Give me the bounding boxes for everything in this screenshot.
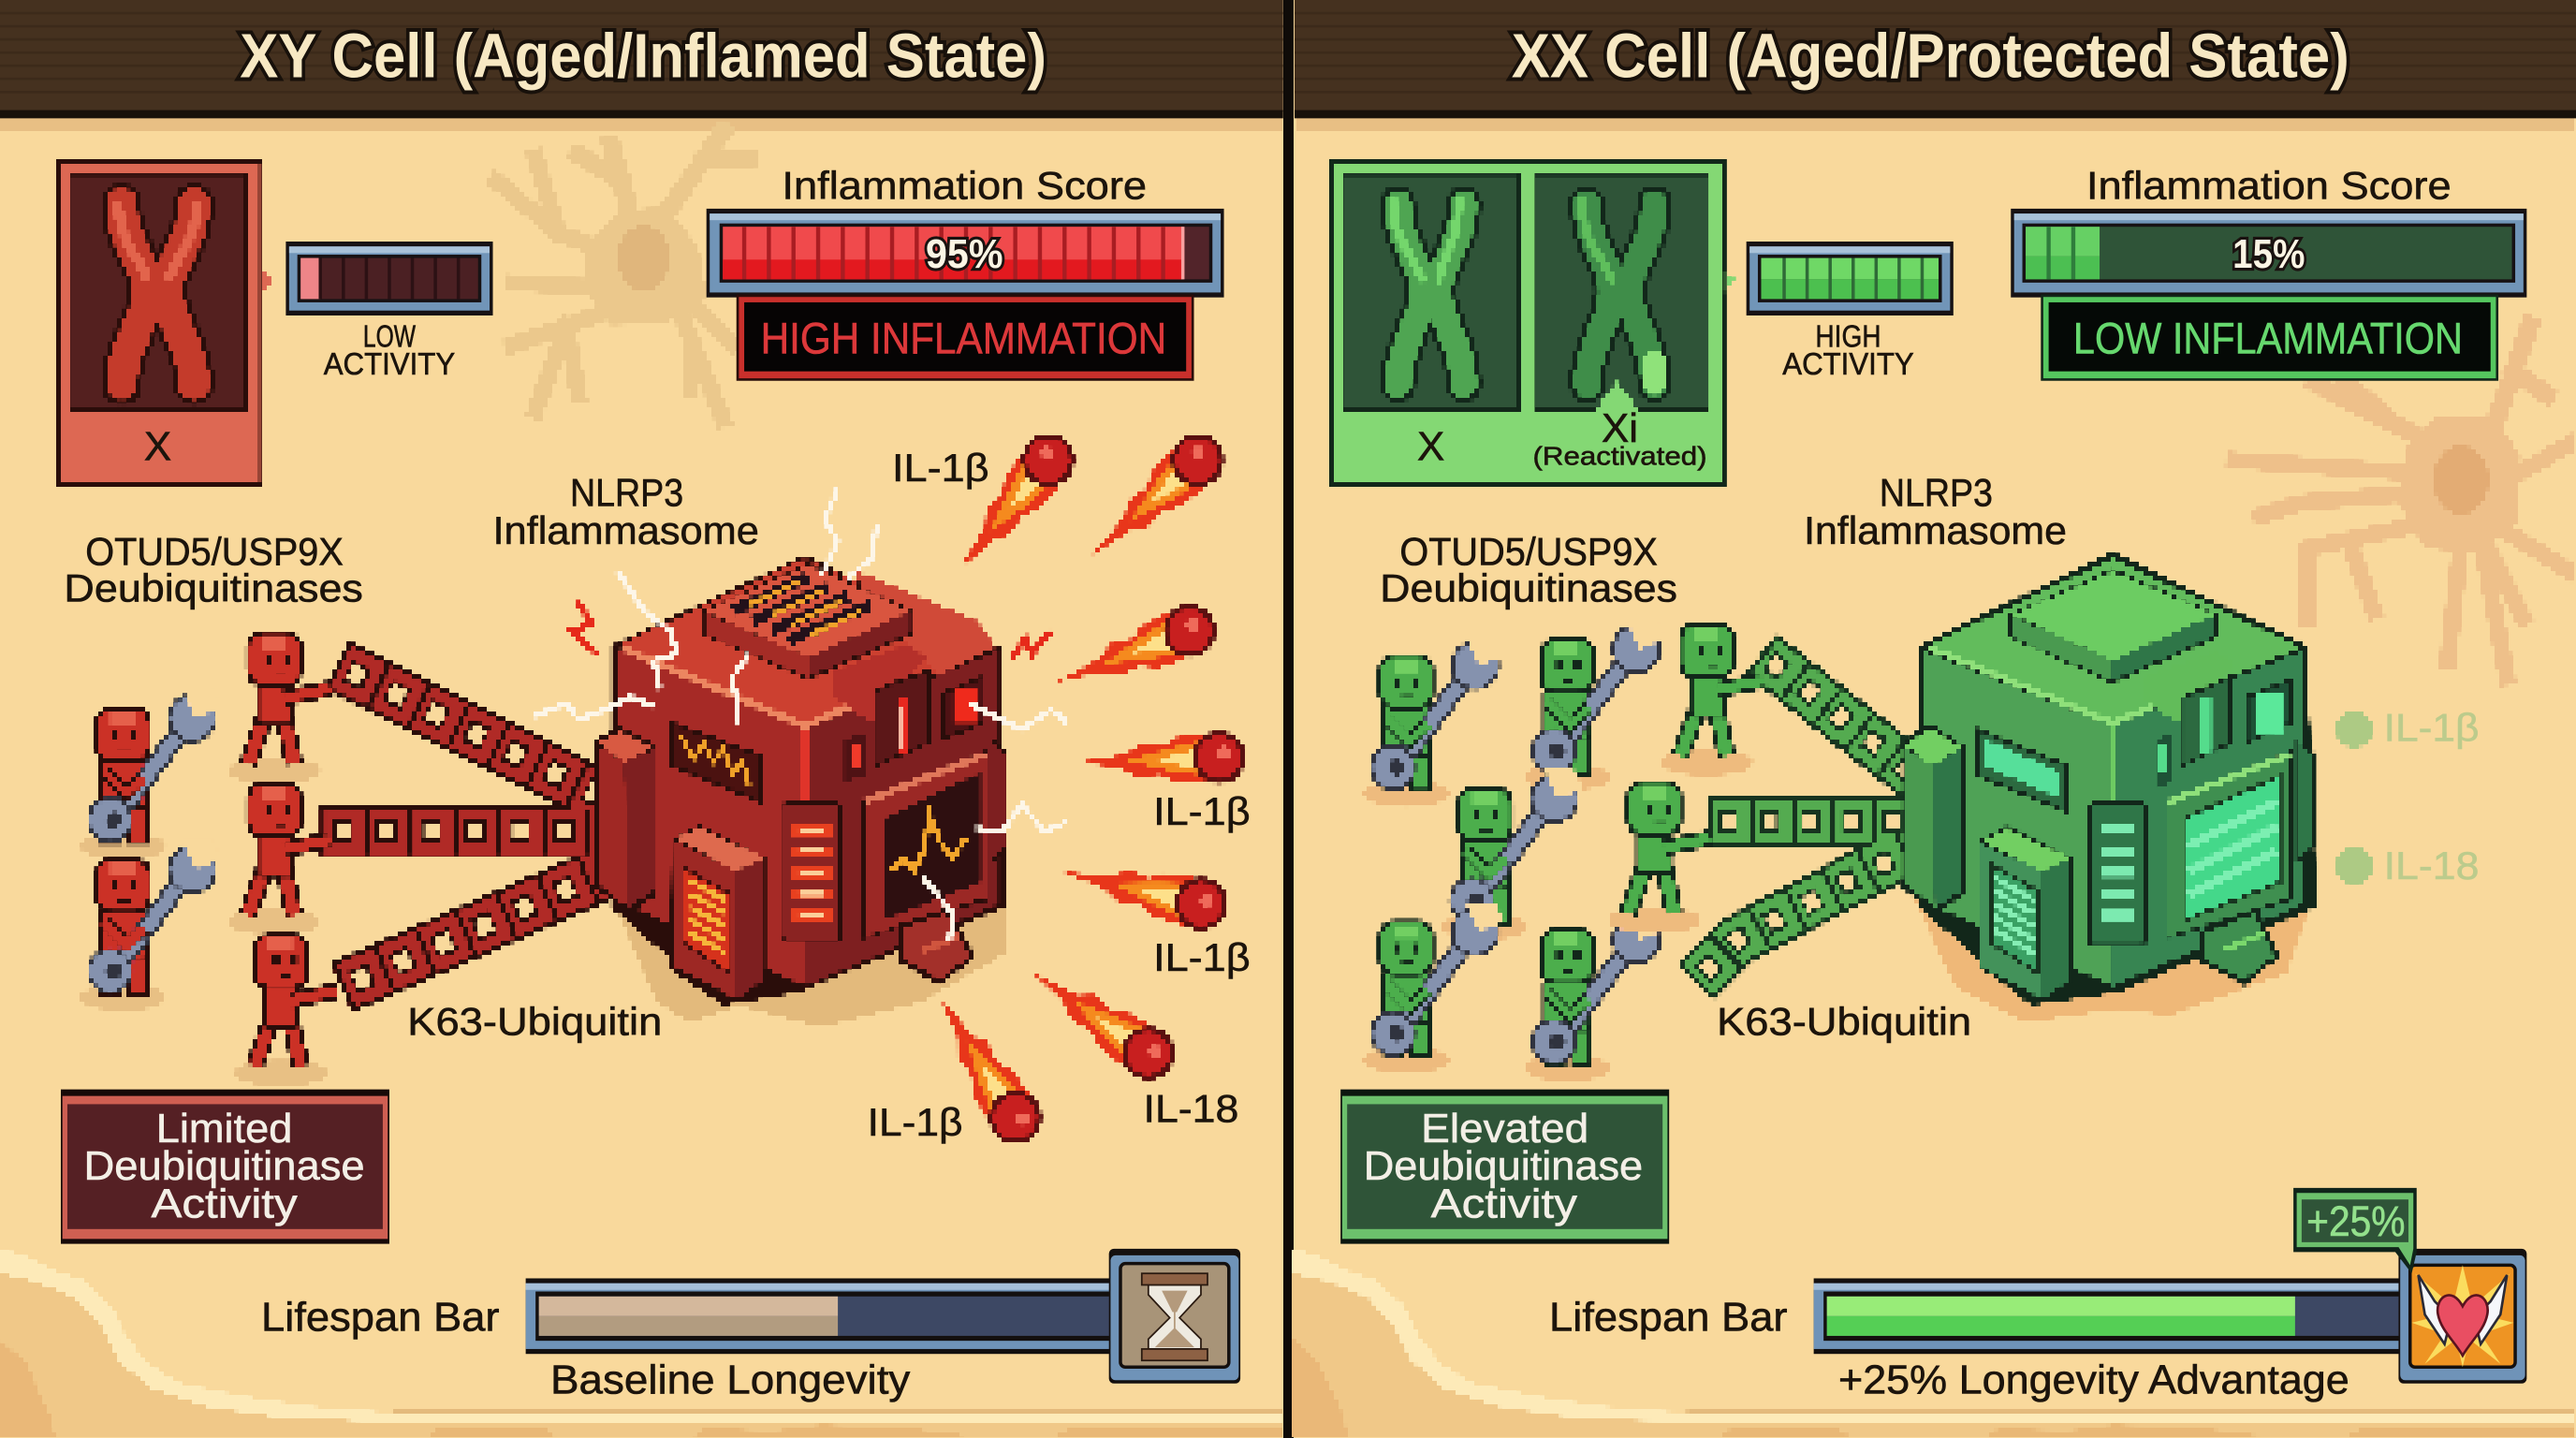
label: Xi reactivated: (Reactivated) [1533, 442, 1707, 471]
label: K63-ubiquitin: K63-Ubiquitin [407, 1000, 662, 1044]
callout: +25% [2293, 1188, 2417, 1273]
label: NLRP3 inflammasome [493, 471, 759, 552]
callout: elevated deubiquitinase activity [1340, 1090, 1669, 1244]
inflammasome scene: chains, workers, machine, cytokines [80, 423, 1246, 1153]
inflammation score bar 95%: 95% [926, 231, 1003, 277]
label: NLRP3 inflammasome: NLRP3 [1880, 471, 1993, 515]
caption: baseline longevity: Baseline Longevity [550, 1357, 910, 1402]
machine: NLRP3 inflammasome [1902, 552, 2317, 1005]
label: X: X [1417, 423, 1444, 469]
faded cytokine labels: IL-18 [2384, 844, 2479, 888]
label: low activity: LOW [363, 319, 416, 354]
inflammasome scene: chains, workers, machine [1364, 552, 2372, 1081]
label: deubiquitinases [1380, 530, 1677, 609]
gene activity meter [1747, 242, 1954, 315]
callout: elevated deubiquitinase activity: Deubiquitinase [1364, 1143, 1643, 1189]
inflammation score bar 95% [707, 209, 1224, 298]
callout: limited deubiquitinase activity: Limited [156, 1106, 292, 1152]
background sand and neuron decoration [0, 118, 1283, 1438]
inflammation score bar 15%: 15% [2232, 231, 2305, 277]
icon: hourglass [1109, 1249, 1240, 1384]
machine: NLRP3 inflammasome [594, 555, 1005, 1005]
panel: XY cell aged inflamed state [0, 0, 1283, 1438]
K63 ubiquitin chains [320, 666, 618, 988]
label: NLRP3 inflammasome: NLRP3 [570, 471, 683, 515]
title: XX Cell (Aged/Protected State) [1512, 22, 2349, 91]
cytokine labels: IL-1β [1153, 789, 1251, 833]
faded cytokine labels [2384, 706, 2479, 888]
callout: limited deubiquitinase activity: Deubiquitinase [84, 1143, 365, 1189]
label: inflammation score: Inflammation Score [782, 163, 1147, 207]
icon: winged heart [2398, 1249, 2526, 1384]
label: deubiquitinases: OTUD5/USP9X [85, 530, 344, 574]
cytokine labels [868, 446, 1251, 1144]
center divider [1283, 0, 1294, 1438]
machine ground shadow [611, 896, 1005, 1027]
label: low activity: ACTIVITY [324, 347, 455, 382]
badge: high inflammation: HIGH INFLAMMATION [761, 314, 1166, 363]
badge: low inflammation: LOW INFLAMMATION [2073, 314, 2463, 363]
label: deubiquitinases: OTUD5/USP9X [1399, 530, 1658, 574]
label: NLRP3 inflammasome: Inflammasome [1804, 508, 2067, 552]
gene activity meter [285, 242, 493, 315]
label: high activity: ACTIVITY [1782, 347, 1914, 382]
deubiquitinase workers with wrenches [80, 633, 337, 1086]
label: lifespan bar: Lifespan Bar [1549, 1295, 1788, 1341]
panel: XX cell aged protected state [1293, 0, 2576, 1438]
faded cytokine labels: IL-1β [2384, 706, 2479, 750]
label: deubiquitinases [64, 530, 363, 609]
inflammation score bar 15% [2011, 209, 2526, 298]
callout: elevated deubiquitinase activity: Activity [1431, 1181, 1577, 1227]
deubiquitinase workers with wrenches [1364, 620, 1763, 1081]
title: XY Cell (Aged/Inflamed State) [240, 22, 1046, 91]
label: NLRP3 inflammasome [1804, 471, 2067, 552]
label: lifespan bar: Lifespan Bar [261, 1295, 500, 1341]
callout: limited deubiquitinase activity: Activity [151, 1181, 298, 1227]
chromosome X card [56, 157, 272, 487]
cytokine labels: IL-18 [1144, 1087, 1238, 1131]
label: deubiquitinases: Deubiquitinases [1380, 565, 1677, 609]
label: high activity: HIGH [1815, 319, 1881, 354]
label: Xi reactivated [1533, 405, 1707, 471]
faded cytokine markers [2336, 712, 2372, 884]
header bar [1295, 0, 2576, 118]
label: X: X [144, 423, 171, 469]
badge: low inflammation [2042, 296, 2497, 379]
cytokine labels: IL-1β [1153, 935, 1251, 979]
machine ground shadow [1915, 896, 2313, 1022]
label: low activity [324, 319, 455, 382]
label: deubiquitinases: Deubiquitinases [64, 565, 363, 609]
label: NLRP3 inflammasome: Inflammasome [493, 508, 759, 552]
background sand and neuron decoration [1293, 118, 2576, 1438]
label: inflammation score: Inflammation Score [2086, 163, 2452, 207]
label: high activity [1782, 319, 1914, 382]
badge: high inflammation [738, 296, 1193, 379]
caption: longevity advantage: +25% Longevity Advantage [1838, 1357, 2349, 1402]
callout: elevated deubiquitinase activity: Elevated [1421, 1106, 1588, 1152]
chromosome XX card [1329, 157, 1734, 487]
K63 ubiquitin chains [1695, 654, 1925, 983]
header bar [0, 0, 1283, 118]
cytokine labels: IL-1β [868, 1100, 962, 1144]
lifespan bar: baseline [526, 1278, 1117, 1354]
callout: limited deubiquitinase activity [61, 1090, 389, 1244]
cytokine labels: IL-1β [892, 446, 989, 490]
callout: +25%: +25% [2306, 1197, 2405, 1245]
cytokine fireballs [918, 423, 1246, 1153]
lightning sparks [534, 490, 1068, 940]
lifespan bar: extended [1814, 1278, 2405, 1354]
label: Xi reactivated: Xi [1602, 405, 1638, 451]
label: K63-ubiquitin: K63-Ubiquitin [1717, 1000, 1971, 1044]
